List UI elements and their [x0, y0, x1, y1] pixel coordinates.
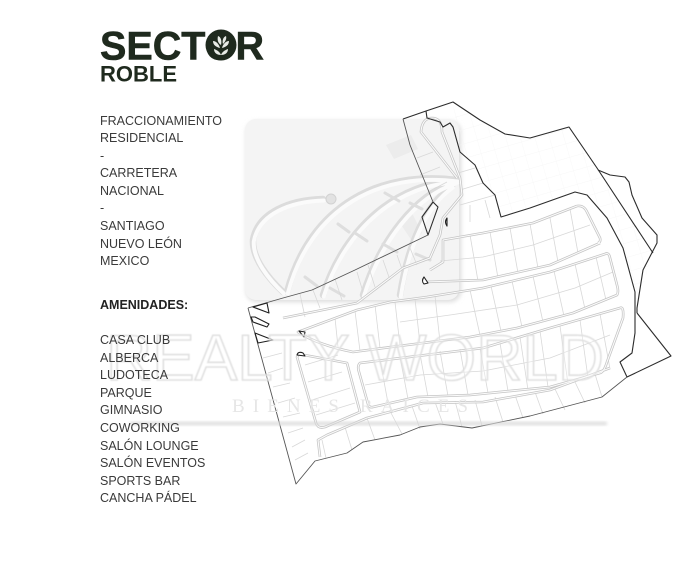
text block: amenities list: COWORKING: [100, 421, 180, 435]
north area faint grid: [453, 104, 653, 310]
text block: location: [100, 114, 222, 268]
watermark: REALTY WORLD: REALTY WORLD: [106, 321, 604, 394]
parcel boundary: [403, 102, 671, 377]
text block: location: SANTIAGO: [100, 219, 165, 233]
watermark: BIENES RAICES: BIENES RAICES: [232, 396, 468, 417]
logo: SECTOR ROBLE: SECTOR: [100, 24, 264, 68]
text block: amenities list: PARQUE: [100, 386, 152, 400]
text block: location: -: [100, 149, 104, 163]
text block: amenities list: LUDOTECA: [100, 368, 168, 382]
icon: leaf roundel: [206, 30, 236, 60]
watermark: rounded globe badge: [245, 119, 461, 302]
text block: location: CARRETERA: [100, 166, 177, 180]
text block: location: MEXICO: [100, 254, 149, 268]
text block: location: -: [100, 201, 104, 215]
text block: amenities list: ALBERCA: [100, 351, 158, 365]
text block: location: NUEVO LEÓN: [100, 237, 182, 251]
text block: location: NACIONAL: [100, 184, 164, 198]
text block: location: FRACCIONAMIENTO: [100, 114, 222, 128]
text block: amenities list: [100, 333, 205, 505]
lot lines: [263, 152, 613, 460]
text block: amenities list: SALÓN LOUNGE: [100, 439, 199, 453]
black markers: [251, 218, 447, 356]
text block: amenities list: SPORTS BAR: [100, 474, 180, 488]
text block: amenities list: GIMNASIO: [100, 403, 163, 417]
road edges (double curb lines): [283, 118, 623, 457]
text block: location: RESIDENCIAL: [100, 131, 183, 145]
text block: amenities list: CASA CLUB: [100, 333, 170, 347]
heading: amenidades: AMENIDADES:: [100, 298, 188, 312]
logo: SECTOR ROBLE: ROBLE: [100, 62, 177, 86]
text block: amenities list: SALÓN EVENTOS: [100, 456, 205, 470]
site plan: [248, 102, 671, 484]
watermark: underline: [130, 422, 607, 425]
text block: amenities list: CANCHA PÁDEL: [100, 491, 197, 505]
